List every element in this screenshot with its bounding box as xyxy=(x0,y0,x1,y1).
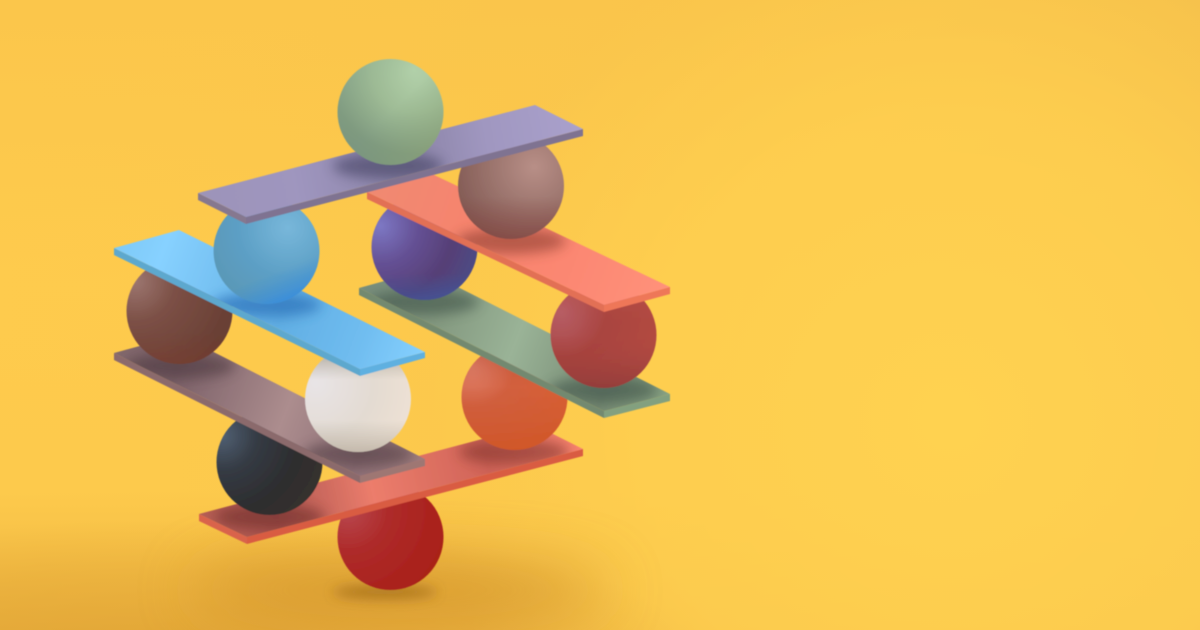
ground shadow xyxy=(190,560,610,620)
sphere: red xyxy=(338,484,444,590)
plank: upper coral xyxy=(367,174,670,312)
sphere: brown xyxy=(126,258,232,364)
sphere: mauve brown xyxy=(458,133,564,239)
sphere: rose red xyxy=(550,282,656,388)
contact shadow under red sphere xyxy=(333,585,437,599)
sphere: violet xyxy=(372,194,478,300)
sphere: black xyxy=(216,409,322,515)
plank: lower coral xyxy=(199,425,583,544)
sphere: orange xyxy=(462,344,568,450)
sphere: blue xyxy=(214,198,320,304)
plank: purple xyxy=(198,105,583,224)
sphere: green xyxy=(338,59,444,165)
plank: mauve xyxy=(114,335,425,483)
plank: sky blue xyxy=(114,230,425,376)
sphere: white xyxy=(305,346,411,452)
plank: green xyxy=(359,270,670,418)
